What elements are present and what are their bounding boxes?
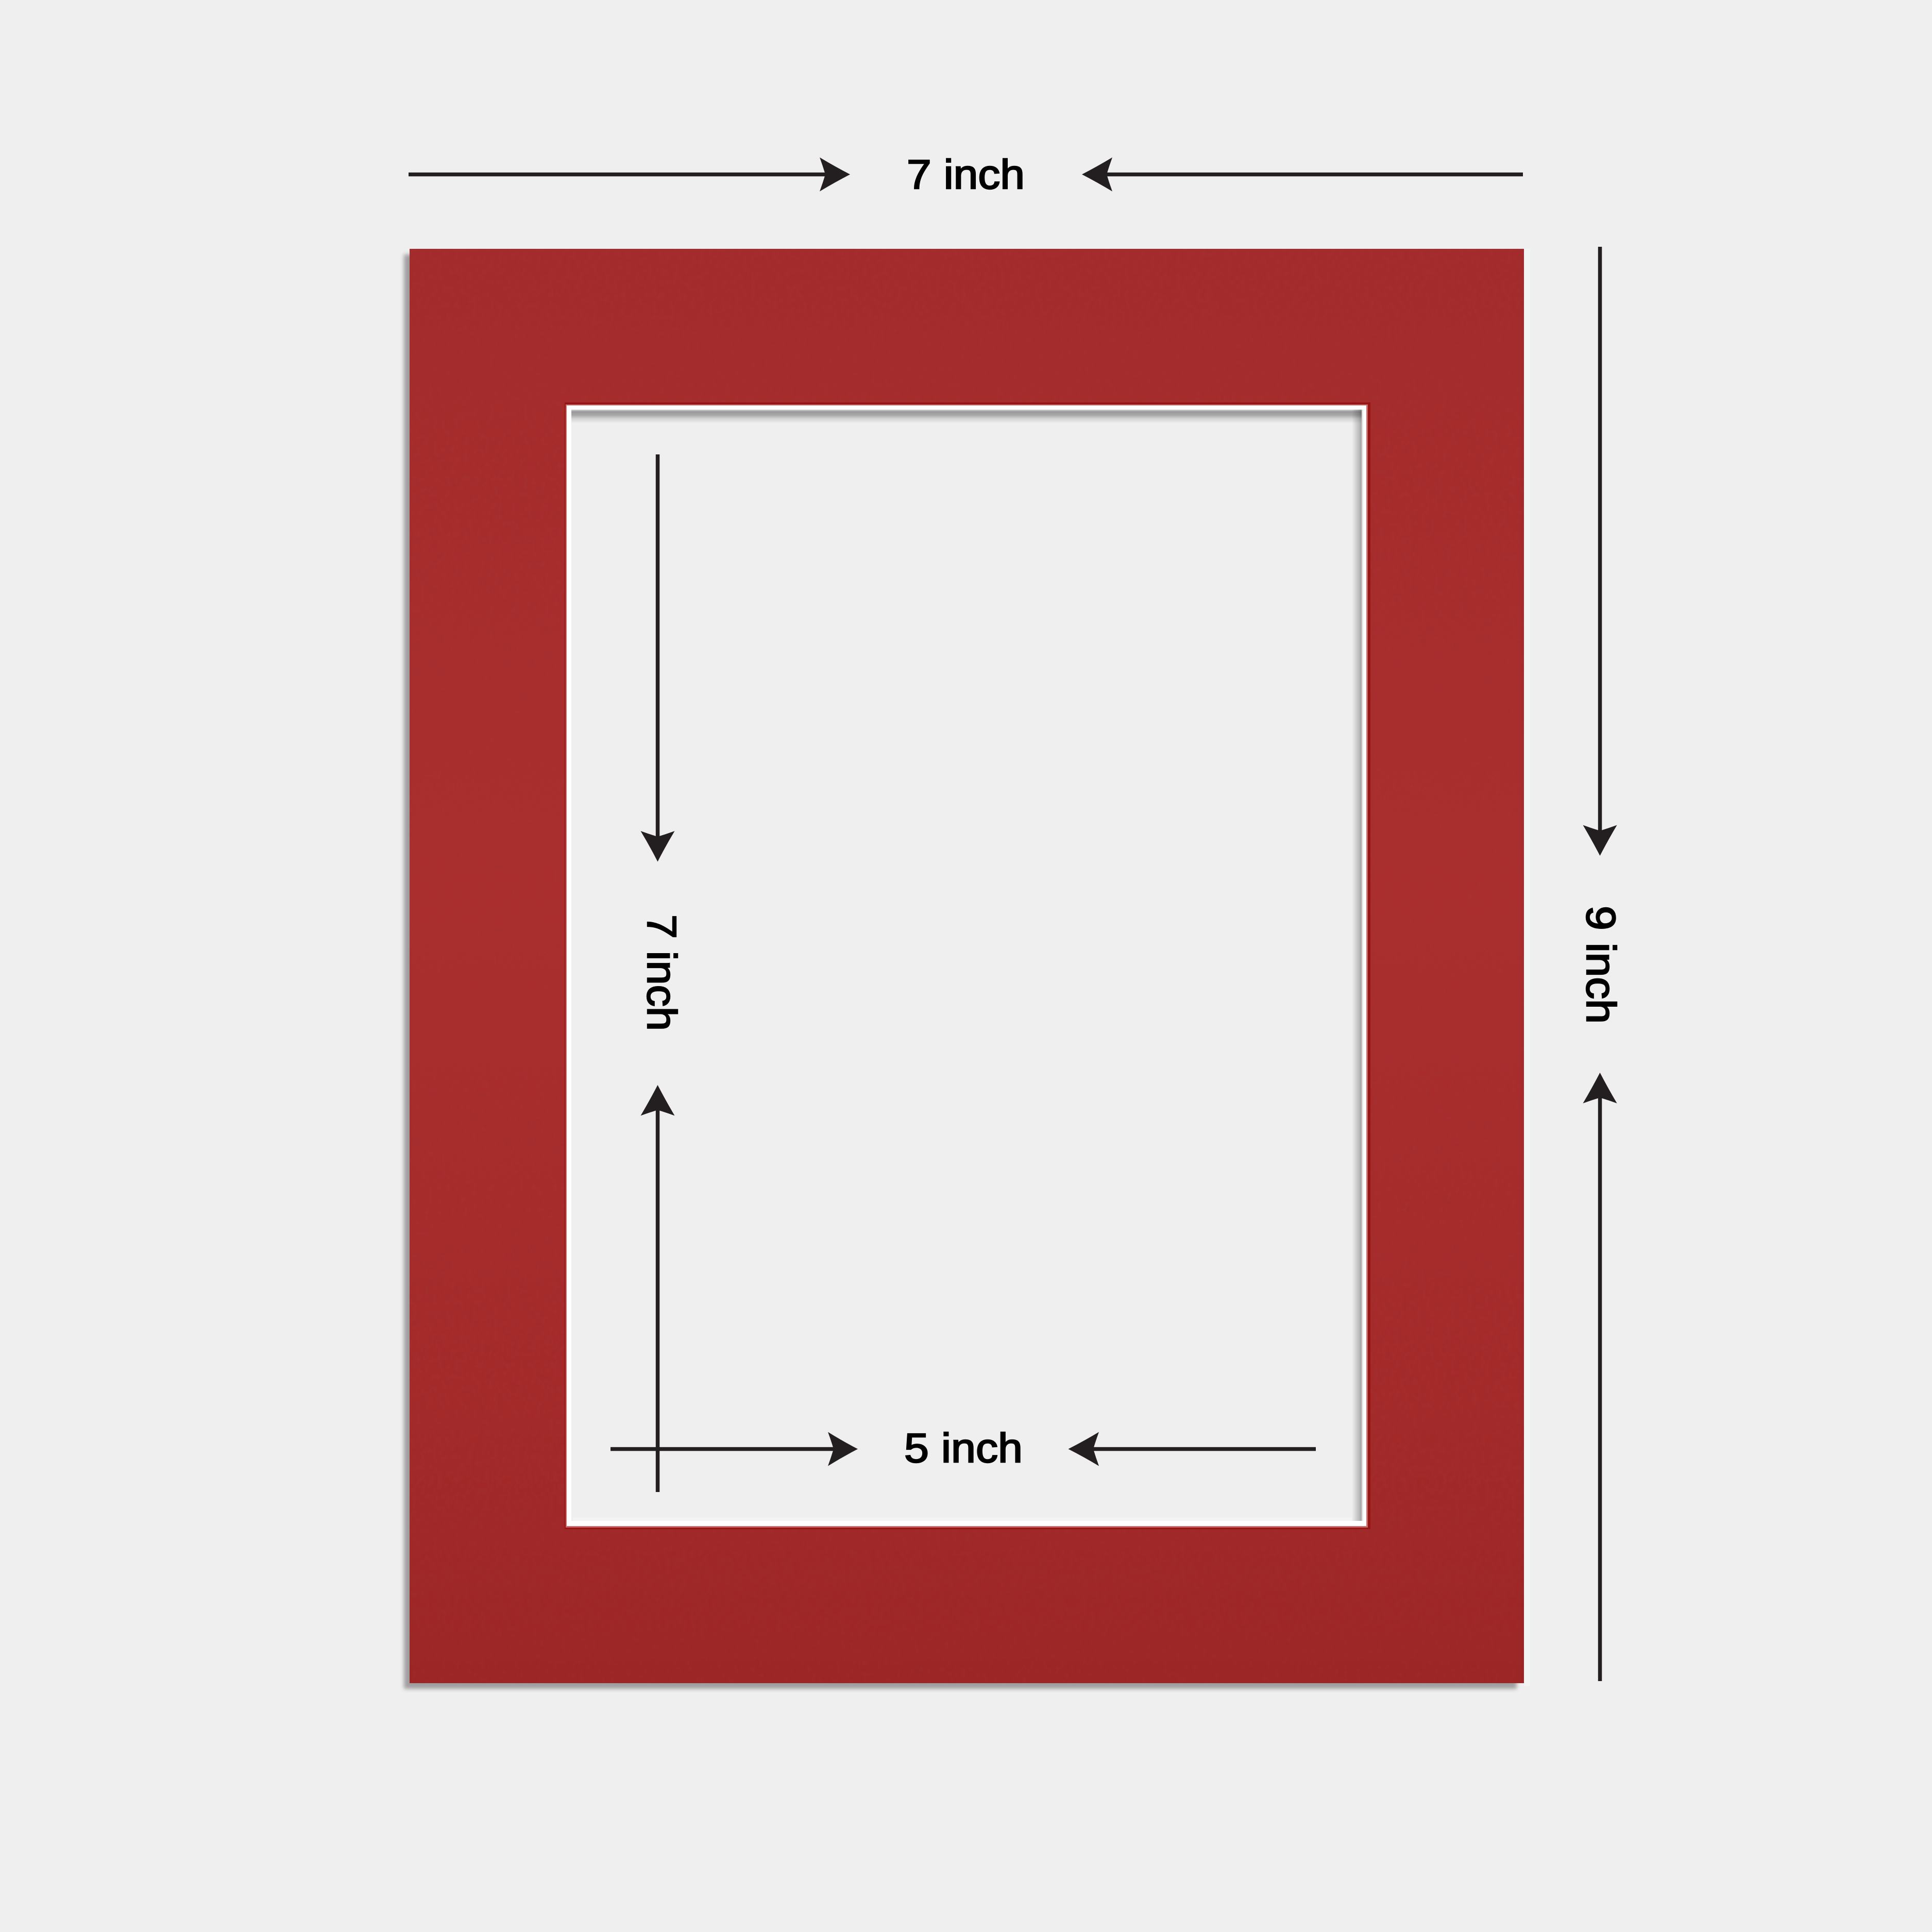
panel: red photo mat [404, 249, 1530, 1689]
dimension: window width 5 inch [611, 1425, 1316, 1471]
label: 7 inch height: 7 inch [639, 914, 685, 1031]
arrow: window width right [1069, 1432, 1316, 1466]
arrow: window height top [641, 454, 675, 861]
arrow: window height bottom [641, 1085, 675, 1492]
arrow: outer height bottom [1583, 1073, 1617, 1681]
mat right edge halo [1524, 249, 1530, 1686]
label: 9 inch height: 9 inch [1578, 906, 1624, 1024]
arrow: outer width left [409, 158, 850, 192]
label: 7 inch width: 7 inch [907, 151, 1025, 197]
label: 5 inch width: 5 inch [904, 1425, 1023, 1471]
dimension: window height 7 inch [639, 454, 685, 1492]
dimension: outer height 9 inch [1578, 247, 1624, 1681]
arrow: window width left [611, 1432, 858, 1466]
mat window opening [565, 402, 1370, 1529]
dimension: outer width 7 inch [409, 151, 1523, 197]
mat board [410, 249, 1524, 1683]
mat drop shadow [404, 255, 1517, 1689]
arrow: outer width right [1082, 158, 1523, 192]
arrow: outer height top [1583, 247, 1617, 856]
